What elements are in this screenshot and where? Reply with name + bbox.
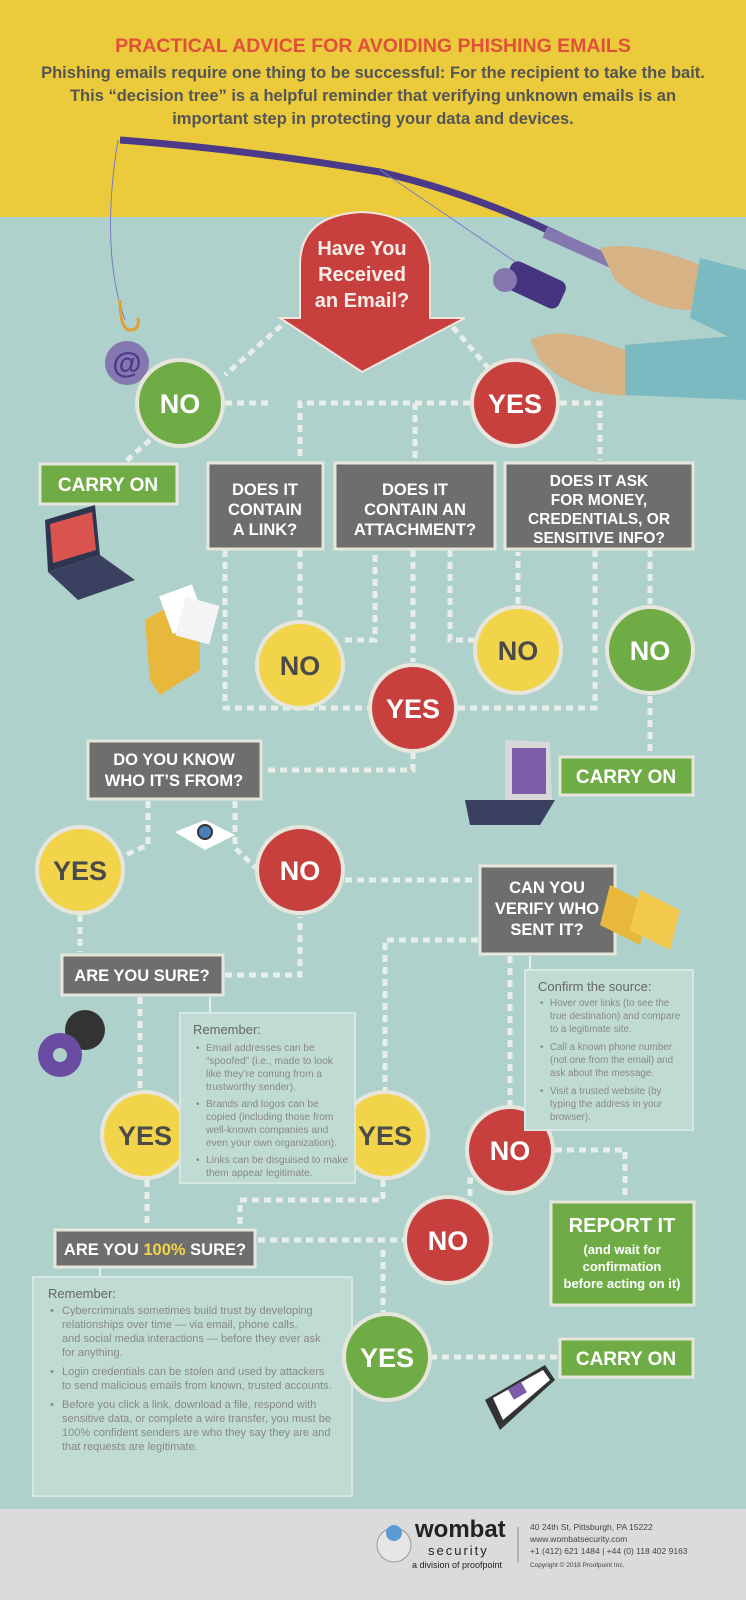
box: money: SENSITIVE INFO? xyxy=(533,530,665,547)
circle: NO money: NO xyxy=(630,636,670,666)
box: know: DO YOU KNOW xyxy=(113,751,235,769)
connectors xyxy=(80,318,650,1357)
circle: YES red top: YES xyxy=(488,389,542,419)
remember box 1: Remember: xyxy=(193,1022,261,1037)
confirm the source box: Visit a trusted website (by xyxy=(550,1086,662,1097)
confirm the source box: • xyxy=(540,998,544,1009)
box: sure: ARE YOU SURE? xyxy=(74,967,210,985)
carry on 1 xyxy=(40,464,177,504)
circle: NO green top: NO xyxy=(160,389,200,419)
circle: YES center xyxy=(370,665,456,751)
circle: NO 100% xyxy=(405,1197,491,1283)
box: sure xyxy=(62,955,223,995)
box: verify: CAN YOU xyxy=(509,879,585,897)
circle: YES sure xyxy=(102,1092,188,1178)
circle: YES know xyxy=(37,827,123,913)
remember box 2: relationships over time — via email, phone calls, xyxy=(62,1319,297,1331)
box: money: FOR MONEY, xyxy=(551,492,647,509)
box: money xyxy=(505,463,693,549)
remember box 1: even your own organization). xyxy=(206,1138,337,1149)
remember box 1: Links can be disguised to make xyxy=(206,1155,348,1166)
box: verify: SENT IT? xyxy=(510,921,584,939)
icon: envelopes xyxy=(600,885,680,950)
remember box 1: • xyxy=(196,1155,200,1166)
remember box 2: Before you click a link, download a file, respond with xyxy=(62,1399,316,1411)
report it: (and wait for xyxy=(583,1242,661,1257)
subtitle: Phishing emails require one thing to be successful: For the recipient to take the bait. xyxy=(41,64,705,82)
circle: NO know: NO xyxy=(280,856,320,886)
circle: YES green final: YES xyxy=(360,1343,414,1373)
remember box 1: • xyxy=(196,1099,200,1110)
circle: YES sure: YES xyxy=(118,1121,172,1151)
circle: YES know: YES xyxy=(53,856,107,886)
circle: YES center: YES xyxy=(386,694,440,724)
carry on 3: CARRY ON xyxy=(576,1349,676,1370)
footer contact: 40 24th St, Pittsburgh, PA 15222 xyxy=(530,1522,653,1532)
confirm the source box: true destination) and compare xyxy=(550,1011,681,1022)
subtitle: important step in protecting your data and devices. xyxy=(172,110,574,128)
confirm the source box xyxy=(525,970,693,1130)
carry on 1: CARRY ON xyxy=(58,475,158,496)
icon: hook with @ xyxy=(105,300,149,385)
box: attachment: CONTAIN AN xyxy=(364,501,466,519)
carry on 2: CARRY ON xyxy=(576,767,676,788)
footer logo: security xyxy=(428,1543,489,1558)
remember box 1: Email addresses can be xyxy=(206,1043,315,1054)
icon: laptop left xyxy=(45,505,135,600)
remember box 2: Login credentials can be stolen and used by attackers xyxy=(62,1366,325,1378)
start arrow: Have You Received an Email?: Have You xyxy=(317,238,407,260)
box: money: CREDENTIALS, OR xyxy=(528,511,670,528)
confirm the source box: Hover over links (to see the xyxy=(550,998,670,1009)
circle: YES verify xyxy=(342,1092,428,1178)
confirm the source box: ask about the message. xyxy=(550,1068,654,1079)
circle: NO attachment xyxy=(475,607,561,693)
box: 100% sure xyxy=(55,1230,255,1267)
remember box 1: • xyxy=(196,1043,200,1054)
icon: phone xyxy=(485,1365,555,1430)
box: verify xyxy=(480,866,615,954)
remember box 2: Cybercriminals sometimes build trust by developing xyxy=(62,1305,313,1317)
circle: NO attachment: NO xyxy=(498,636,538,666)
footer contact: www.wombatsecurity.com xyxy=(529,1534,627,1544)
footer logo: wombat xyxy=(414,1516,506,1543)
footer logo xyxy=(377,1516,506,1570)
icon: laptop envelope xyxy=(465,740,555,825)
confirm the source box: Call a known phone number xyxy=(550,1042,673,1053)
remember box 1: copied (including those from xyxy=(206,1112,333,1123)
subtitle xyxy=(41,64,705,128)
box: attachment xyxy=(335,463,495,549)
remember box 1: Brands and logos can be xyxy=(206,1099,319,1110)
box: know xyxy=(88,741,261,799)
report it: REPORT IT xyxy=(569,1215,675,1237)
remember box 1: trustworthy sender). xyxy=(206,1082,296,1093)
remember box 1: like they’re coming from a xyxy=(206,1069,322,1080)
box: link xyxy=(208,463,323,549)
circle: YES verify: YES xyxy=(358,1121,412,1151)
remember box 2: Remember: xyxy=(48,1286,116,1301)
remember box 2: and social media interactions — before they ever ask xyxy=(62,1333,321,1345)
remember box 1 xyxy=(180,1013,355,1183)
circle: NO link: NO xyxy=(280,651,320,681)
icon: magnifier xyxy=(175,820,235,850)
green boxes xyxy=(40,464,694,1377)
circle: NO green top xyxy=(137,360,223,446)
circle: YES green final xyxy=(344,1314,430,1400)
remember box 2: for anything. xyxy=(62,1347,123,1359)
box: money: DOES IT ASK xyxy=(550,473,649,490)
box: 100% sure: ARE YOU 100% SURE? xyxy=(64,1241,246,1259)
confirm the source box: (not one from the email) and xyxy=(550,1055,673,1066)
circle: NO verify xyxy=(467,1107,553,1193)
circle: NO link xyxy=(257,622,343,708)
remember box 2: sensitive data, or complete a wire transfer, you must be xyxy=(62,1413,331,1425)
remember box 2: • xyxy=(50,1366,54,1378)
remember box 1: them appear legitimate. xyxy=(206,1168,312,1179)
confirm the source box: Confirm the source: xyxy=(538,979,651,994)
confirm the source box: • xyxy=(540,1086,544,1097)
remember box 2: • xyxy=(50,1399,54,1411)
circle: NO verify: NO xyxy=(490,1136,530,1166)
fishing rod xyxy=(110,140,746,400)
start arrow: Have You Received an Email?: an Email? xyxy=(315,290,409,312)
report it: confirmation xyxy=(583,1259,661,1274)
footer logo: a division of proofpoint xyxy=(412,1560,503,1570)
confirm the source box: browser). xyxy=(550,1112,591,1123)
report it: before acting on it) xyxy=(564,1276,680,1291)
circle: NO know xyxy=(257,827,343,913)
remember box 2: to send malicious emails from known, trusted accounts. xyxy=(62,1380,332,1392)
circles xyxy=(37,360,693,1283)
start arrow: Have You Received an Email?: Received xyxy=(318,264,406,286)
box: link: A LINK? xyxy=(233,521,297,539)
icon: folder xyxy=(145,584,219,695)
box: attachment: DOES IT xyxy=(382,481,448,499)
confirm the source box: to a legitimate site. xyxy=(550,1024,632,1035)
carry on 2 xyxy=(560,757,693,795)
remember box 2 xyxy=(33,1277,352,1496)
box: know: WHO IT’S FROM? xyxy=(105,772,243,790)
confirm the source box: • xyxy=(540,1042,544,1053)
icon: hook with @: @ xyxy=(112,347,142,380)
box: link: DOES IT xyxy=(232,481,298,499)
report it xyxy=(551,1202,694,1305)
carry on 3 xyxy=(560,1339,693,1377)
confirm the source box: typing the address in your xyxy=(550,1099,663,1110)
subtitle: This “decision tree” is a helpful reminder that verifying unknown emails is an xyxy=(70,87,676,105)
remember box 2: 100% confident senders are who they say they are and xyxy=(62,1427,330,1439)
icon: hands xyxy=(530,246,746,400)
remember box 1: “spoofed” (i.e., made to look xyxy=(206,1056,334,1067)
circle: NO money xyxy=(607,607,693,693)
question boxes xyxy=(55,463,693,1267)
footer contact: +1 (412) 621 1484 | +44 (0) 118 402 9163 xyxy=(530,1546,688,1556)
title: PRACTICAL ADVICE FOR AVOIDING PHISHING EMAILS xyxy=(115,35,631,57)
remember box 1: well-known companies and xyxy=(205,1125,329,1136)
footer contact xyxy=(518,1522,688,1569)
box: verify: VERIFY WHO xyxy=(495,900,599,918)
circle: YES red top xyxy=(472,360,558,446)
box: attachment: ATTACHMENT? xyxy=(354,521,476,539)
footer contact: Copyright © 2018 Proofpoint Inc. xyxy=(530,1561,625,1569)
icon: gears xyxy=(38,1010,105,1077)
start arrow: Have You Received an Email? xyxy=(280,212,465,372)
box: link: CONTAIN xyxy=(228,501,302,519)
remember box 2: that requests are legitimate. xyxy=(62,1441,198,1453)
remember box 2: • xyxy=(50,1305,54,1317)
circle: NO 100%: NO xyxy=(428,1226,468,1256)
